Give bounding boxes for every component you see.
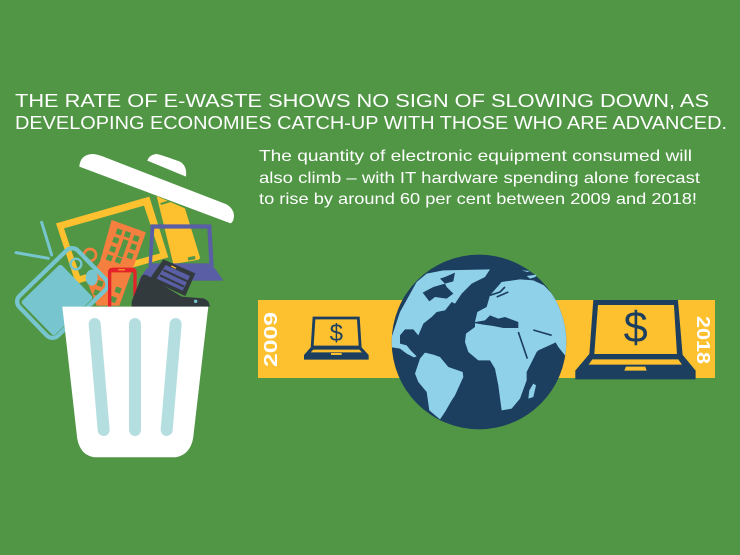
Mediterranean Sea <box>472 315 518 328</box>
icon: bin lid <box>79 154 234 223</box>
body text: to rise by around 60 per cent between 2009 and 2018! <box>259 191 697 208</box>
Hudson Bay and arctic islands <box>423 273 455 301</box>
title: THE RATE OF E-WASTE SHOWS NO SIGN OF SLOWING DOWN, AS <box>15 90 709 111</box>
year label 2018: 2018 <box>693 316 713 364</box>
infographic canvas <box>14 94 726 458</box>
body text: The quantity of electronic equipment consumed will <box>259 148 692 165</box>
icon: purple laptop <box>138 224 223 281</box>
Baltic details <box>490 287 508 297</box>
year label 2009: 2009 <box>261 312 281 367</box>
icon: large laptop <box>575 300 696 379</box>
arctic specks <box>522 270 537 279</box>
icon: small laptop: $ <box>330 320 343 347</box>
icon: yellow tablet <box>157 196 200 264</box>
body text <box>259 148 701 208</box>
icon: dark printer <box>132 259 210 307</box>
icon: bin body <box>62 307 208 457</box>
body text: also climb – with IT hardware spending alone forecast <box>259 170 701 187</box>
title <box>15 90 727 133</box>
Madagascar <box>528 384 536 399</box>
icon: small laptop <box>304 317 369 360</box>
icon: trash can with e-waste <box>14 154 234 457</box>
icon: red phone <box>110 268 135 313</box>
Red Sea and Persian Gulf <box>518 330 552 359</box>
title: DEVELOPING ECONOMIES CATCH-UP WITH THOSE WHO ARE ADVANCED. <box>15 112 727 133</box>
icon: yellow monitor <box>56 197 168 284</box>
icon: large laptop: $ <box>624 304 648 352</box>
icon: teal television <box>14 222 111 341</box>
Eurasia and Africa <box>465 279 572 410</box>
icon: globe <box>390 255 572 429</box>
yellow band <box>258 300 715 378</box>
icon: orange keyboard <box>84 220 146 306</box>
North America and Greenland <box>390 269 490 357</box>
South America <box>415 353 463 419</box>
